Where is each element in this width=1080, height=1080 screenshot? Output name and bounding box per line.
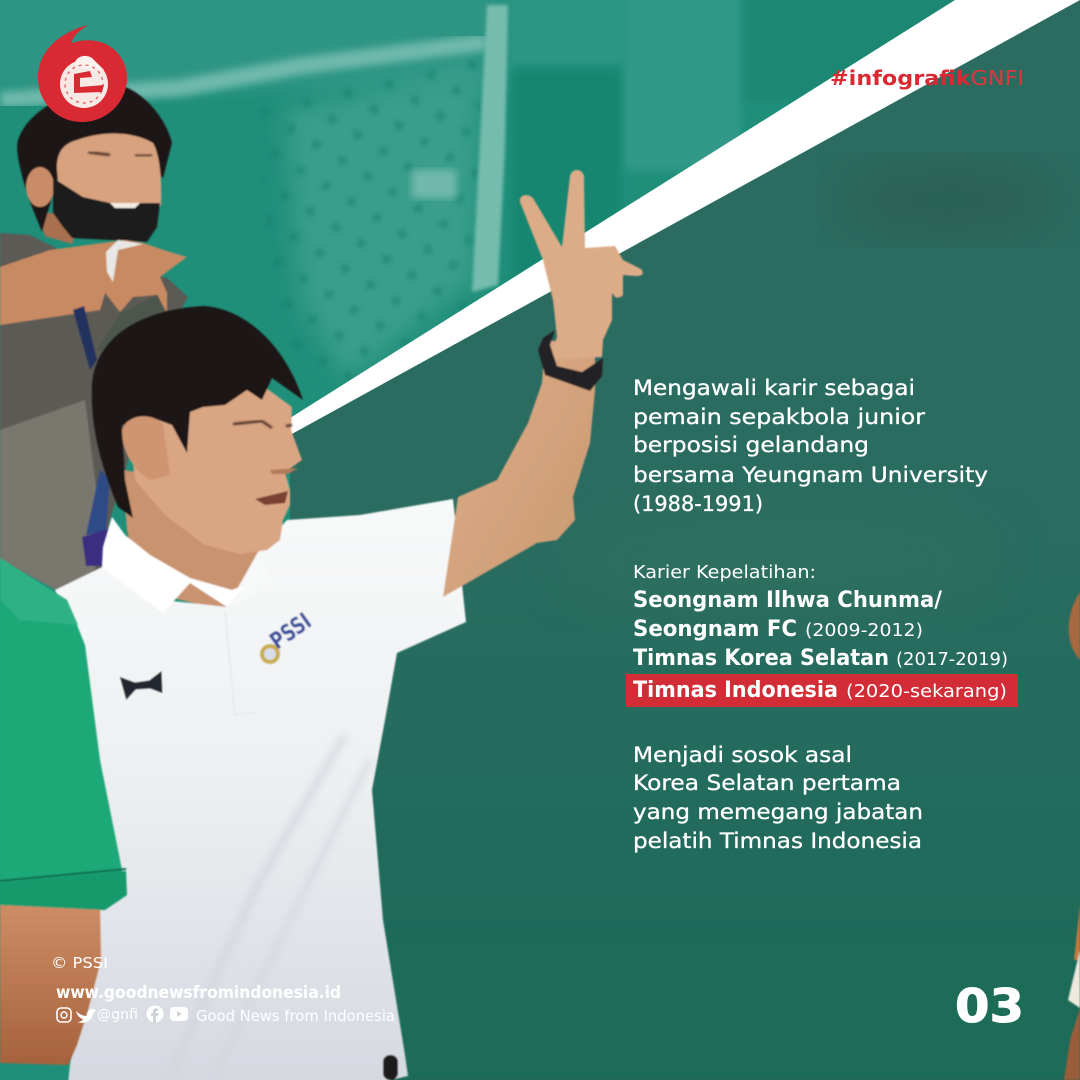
figure: foreground green shirt person: [0, 558, 127, 1065]
face mask: [53, 178, 160, 242]
icon: instagram: [57, 1008, 71, 1022]
shirt tag: [383, 1055, 398, 1080]
text block: early career: berposisi gelandang: [633, 433, 869, 458]
background: dark green textured panel: [290, 0, 1080, 1080]
icon: twitter: [76, 1009, 96, 1023]
white diagonal band: [290, 0, 1080, 435]
text block: coaching career: Timnas Korea Selatan: [633, 645, 889, 671]
teeth: [110, 203, 140, 208]
polo shirt: [55, 499, 466, 1080]
page number: 03: [955, 979, 1024, 1033]
collar: [102, 517, 245, 613]
pointing arm: [0, 240, 187, 325]
text block: early career: bersama Yeungnam University: [633, 463, 988, 488]
sleeve: [0, 558, 127, 910]
figure: man in background with mask, pointing: [0, 84, 188, 592]
text block: early career: [633, 376, 988, 517]
raised arm: [443, 340, 595, 597]
neck: [122, 470, 262, 612]
handle: @gnfi: [97, 1007, 138, 1023]
hair: [92, 306, 303, 518]
text block: coaching career: (2009-2012): [805, 620, 923, 641]
text block: first Korean coach: Menjadi sosok asal: [633, 743, 852, 768]
eye: [233, 421, 292, 428]
hashtag: infografikGNFI: #infografik GNFI: [830, 66, 1024, 90]
highlight: current team: [626, 674, 1018, 707]
text block: coaching career: Seongnam Ilhwa Chunma/: [633, 587, 943, 613]
ear: [26, 167, 54, 207]
hair: [17, 84, 172, 232]
wristband: [538, 330, 603, 391]
figure: right edge partial person: [1064, 592, 1080, 1080]
grey shirt: [0, 233, 188, 592]
neck: [37, 210, 80, 244]
crossbar: [0, 42, 487, 100]
logo: GNFI: [38, 25, 127, 122]
photo credit: © PSSI: [51, 954, 108, 972]
text block: early career: (1988-1991): [633, 492, 763, 517]
lanyard: [73, 306, 97, 370]
page name: Good News from Indonesia: [196, 1007, 395, 1025]
text block: first Korean coach: Korea Selatan pertama: [633, 771, 901, 796]
icon: facebook: [146, 1006, 164, 1023]
text block: first Korean coach: yang memegang jabatan: [633, 800, 923, 825]
figure: main man in white polo: [55, 170, 643, 1080]
PSSI logo: PSSI: [266, 608, 316, 655]
placket: [225, 612, 257, 715]
nose shadow: [270, 468, 298, 474]
text block: first Korean coach: pelatih Timnas Indonesia: [633, 829, 922, 854]
face: [125, 380, 302, 554]
footer: website and social links: www.goodnewsfromindonesia.id: [56, 983, 341, 1003]
goal post: [472, 5, 508, 292]
text block: coaching career: Timnas Indonesia: [633, 677, 838, 703]
eyes: [88, 152, 152, 156]
PSSI logo: [260, 608, 316, 664]
text block: early career: Mengawali karir sebagai: [633, 376, 915, 401]
text block: first Korean coach: [633, 743, 923, 854]
text block: coaching career: Karier Kepelatihan:: [633, 562, 816, 583]
ear: [122, 416, 170, 480]
shirt logo: [119, 670, 163, 701]
olive cap behind hair: [97, 295, 168, 360]
text block: coaching career: (2017-2019): [896, 649, 1008, 670]
arm: [0, 900, 101, 1065]
text block: coaching career: (2020-sekarang): [846, 681, 1007, 702]
face: [57, 134, 161, 206]
shirt folds: [170, 735, 370, 1075]
hand with victory sign: [520, 170, 643, 360]
goal net: [285, 65, 480, 380]
text block: coaching career: [626, 562, 1018, 707]
footer: website and social links: [56, 983, 395, 1025]
mouth: [255, 491, 288, 505]
text block: early career: pemain sepakbola junior: [633, 405, 925, 430]
icon: youtube: [170, 1007, 188, 1021]
text block: coaching career: Seongnam FC: [633, 616, 797, 642]
